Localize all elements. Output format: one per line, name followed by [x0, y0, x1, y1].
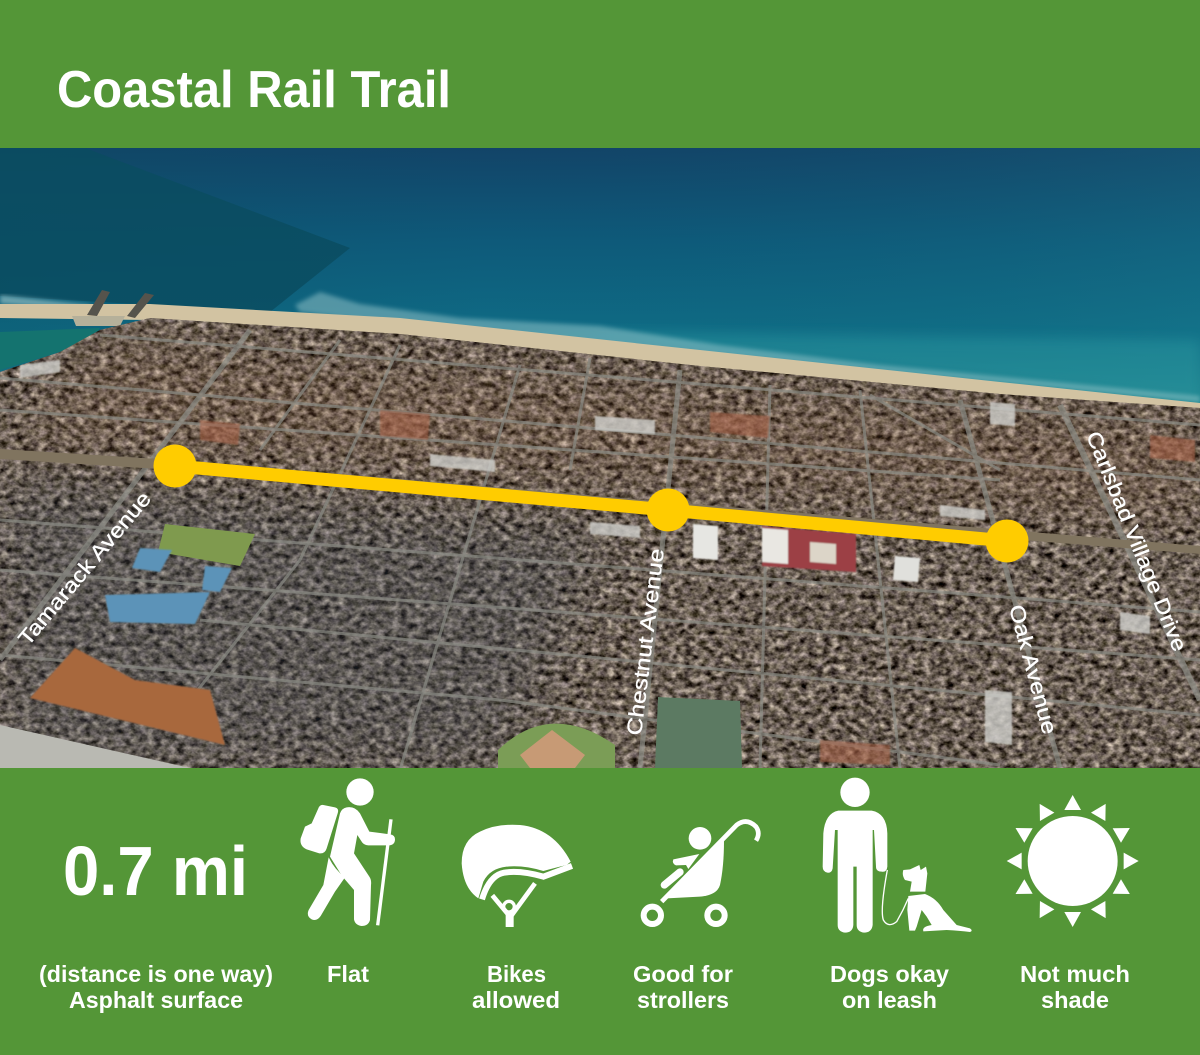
infield [520, 730, 585, 768]
white and red commercial building [693, 524, 920, 582]
label: dogs okay on leash: Dogs okay [830, 961, 949, 987]
label: bikes allowed: Bikes [487, 961, 546, 987]
green sports field [158, 524, 255, 566]
cool tint south west [0, 480, 600, 768]
highway at lower left [0, 725, 190, 768]
label: good for strollers [633, 961, 733, 1013]
title: Coastal Rail Trail [57, 61, 451, 119]
blue roofed school [105, 548, 232, 624]
harbor inlet and jetties [0, 290, 154, 370]
label: flat: Flat [327, 961, 369, 987]
icon: stroller [644, 822, 758, 924]
park field [655, 697, 742, 768]
beach [0, 304, 1200, 412]
icon: person walking a dog on a leash [823, 778, 972, 933]
street label: Oak Avenue: Oak Avenue [1004, 602, 1061, 737]
warm tint north of the rail line [0, 340, 1200, 520]
street grid [0, 330, 1200, 770]
label: not much shade [1020, 961, 1130, 1013]
label: bikes allowed: allowed [472, 987, 560, 1013]
distance caption [39, 961, 273, 1013]
distance caption: (distance is one way) [39, 961, 273, 987]
label: dogs okay on leash [830, 961, 949, 1013]
bright building roofs [20, 360, 1150, 745]
distance figure: 0.7 mi [63, 832, 248, 910]
label: good for strollers: Good for [633, 961, 733, 987]
label: dogs okay on leash: on leash [842, 987, 937, 1013]
trail marker: Tamarack Avenue [154, 444, 196, 488]
icon: bike helmet [462, 825, 572, 927]
header band [0, 0, 1200, 148]
label: bikes allowed [472, 961, 560, 1013]
baseball field [498, 724, 615, 768]
trail marker: Chestnut Avenue [646, 488, 690, 532]
street label: Chestnut Avenue: Chestnut Avenue [623, 547, 669, 737]
footer band [0, 768, 1200, 1055]
street label: Carlsbad Village Drive: Carlsbad Village Drive [1081, 428, 1191, 655]
dirt lot [30, 648, 225, 745]
ocean [0, 148, 1200, 418]
label: good for strollers: strollers [637, 987, 729, 1013]
street label: Tamarack Avenue: Tamarack Avenue [14, 488, 156, 650]
rail corridor [0, 449, 1200, 554]
icon: sun [1007, 795, 1139, 927]
label: not much shade: Not much [1020, 961, 1130, 987]
neighbourhood [0, 300, 1200, 770]
label: not much shade: shade [1041, 987, 1109, 1013]
terracotta roofs [200, 410, 1195, 765]
distance caption: Asphalt surface [69, 987, 243, 1013]
trail marker: Oak Avenue [986, 520, 1028, 562]
trail line [175, 466, 1007, 541]
aerial photo of the trail corridor [0, 148, 1200, 770]
icon: hiker [300, 778, 395, 926]
